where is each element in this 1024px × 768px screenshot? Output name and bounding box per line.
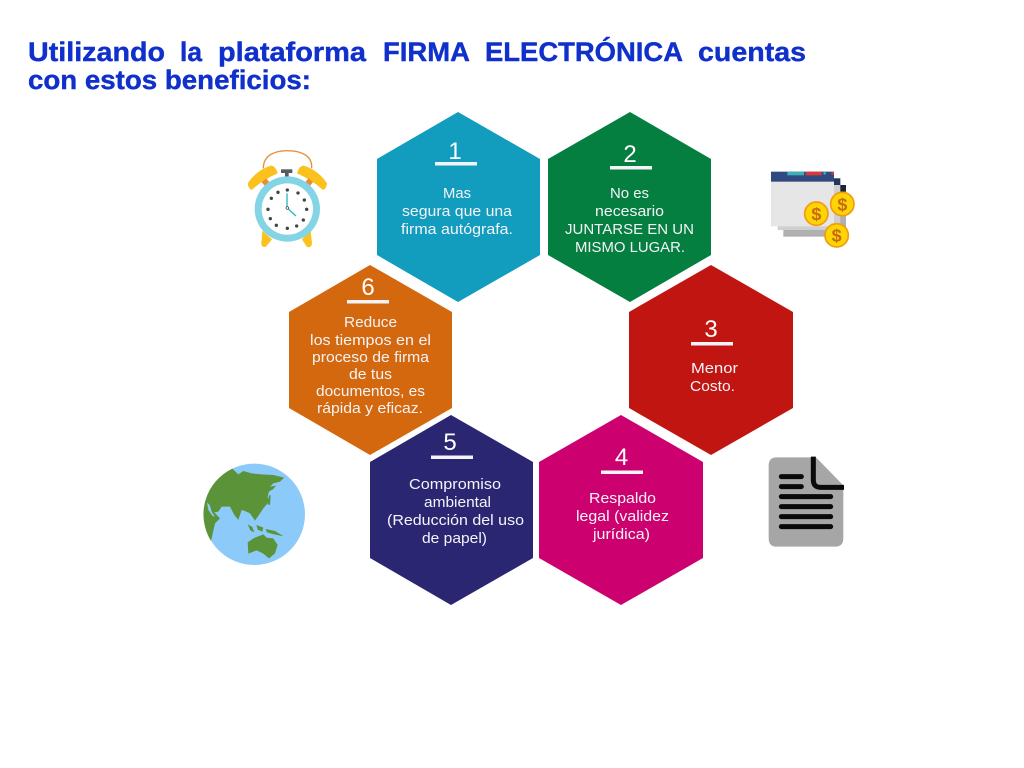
panel: benefit 3 xyxy=(629,265,793,455)
title: con estos beneficios: xyxy=(28,65,311,95)
icon: browser windows with coins: $ xyxy=(811,204,821,224)
panel: benefit 6 xyxy=(289,265,452,455)
panel: benefit 6: los tiempos en el xyxy=(310,332,431,349)
panel: benefit 3: Costo. xyxy=(690,378,735,395)
title: ELECTRÓNICA xyxy=(485,36,683,67)
panel: benefit 4: legal (validez xyxy=(576,508,669,525)
panel: benefit 6: de tus xyxy=(349,366,392,383)
panel: benefit 6: documentos, es xyxy=(316,383,425,400)
panel: benefit 2: necesario xyxy=(595,203,664,220)
panel: benefit 2: MISMO LUGAR. xyxy=(575,239,685,256)
panel: benefit 5: ambiental xyxy=(424,494,491,511)
panel: benefit 6: Reduce xyxy=(344,314,397,331)
title: Utilizando xyxy=(28,37,165,67)
icon: document xyxy=(769,457,844,547)
panel: benefit 5: de papel) xyxy=(422,530,487,547)
panel: benefit 6: rápida y eficaz. xyxy=(317,400,423,417)
panel: benefit 1: firma autógrafa. xyxy=(401,221,513,238)
icon: browser windows with coins: $ xyxy=(837,194,847,214)
panel: benefit 2 xyxy=(548,112,711,302)
panel: benefit 3: 3 xyxy=(704,316,718,343)
panel: benefit 2: 2 xyxy=(623,141,637,168)
panel: benefit 3: Menor xyxy=(691,360,738,377)
title xyxy=(28,36,806,95)
title: plataforma xyxy=(218,37,367,67)
panel: benefit 4: 4 xyxy=(615,444,628,471)
panel: benefit 4: Respaldo xyxy=(589,490,656,507)
panel: benefit 5: 5 xyxy=(443,429,457,456)
panel: benefit 1: segura que una xyxy=(402,203,513,220)
icon: alarm clock xyxy=(248,151,327,247)
icon: globe xyxy=(203,464,305,565)
title: cuentas xyxy=(698,37,806,67)
title: FIRMA xyxy=(383,37,470,67)
panel: benefit 6: 6 xyxy=(361,274,375,301)
icon: browser windows with coins: $ xyxy=(832,226,842,246)
panel: benefit 2: No es xyxy=(610,185,649,202)
panel: benefit 5: (Reducción del uso xyxy=(387,512,524,529)
panel: benefit 5: Compromiso xyxy=(409,476,501,493)
panel: benefit 4 xyxy=(539,415,703,605)
panel: benefit 5 xyxy=(370,415,533,605)
panel: benefit 4: jurídica) xyxy=(592,526,650,543)
panel: benefit 1: 1 xyxy=(448,138,462,165)
panel: benefit 2: JUNTARSE EN UN xyxy=(565,221,694,238)
icon: browser windows with coins xyxy=(771,172,854,247)
panel: benefit 6: proceso de firma xyxy=(312,349,430,366)
panel: benefit 1 xyxy=(377,112,540,302)
panel: benefit 1: Mas xyxy=(443,185,471,202)
title: la xyxy=(180,37,203,67)
